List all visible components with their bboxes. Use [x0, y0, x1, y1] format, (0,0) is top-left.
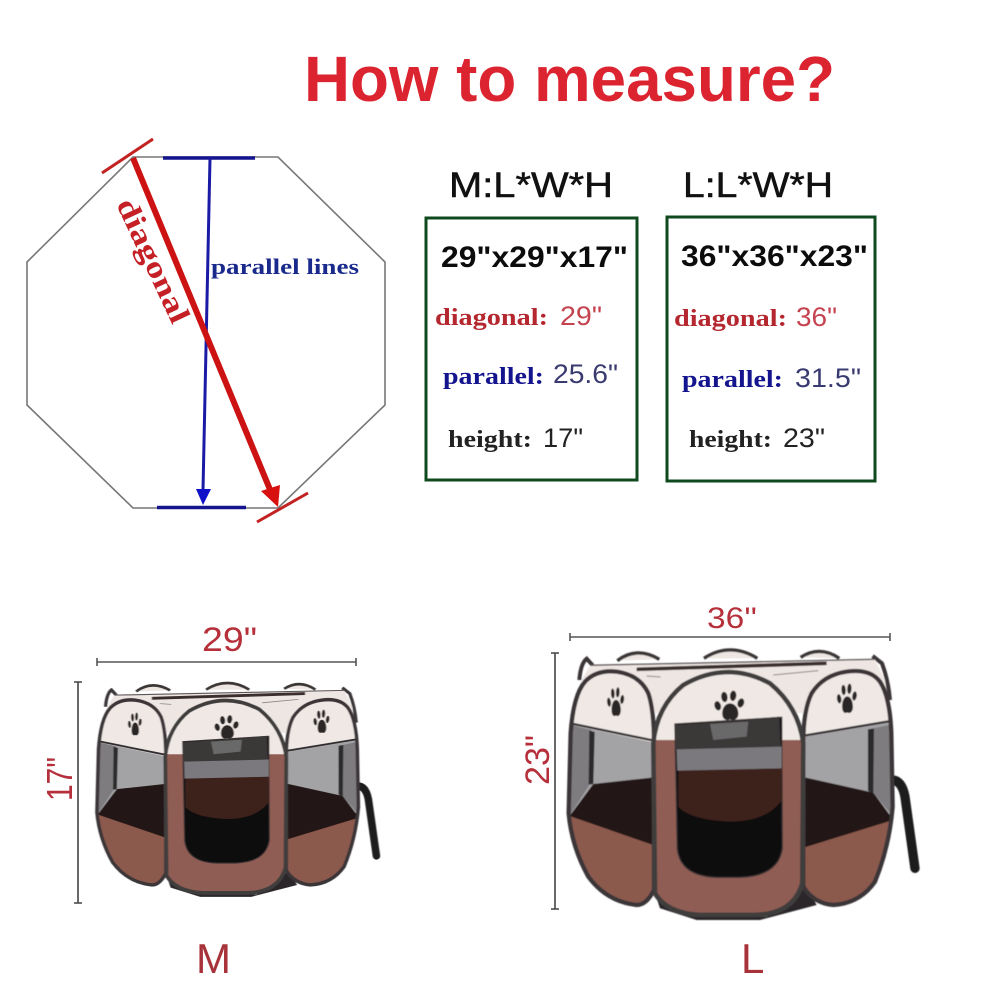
width dimension: 29 inches [97, 621, 356, 666]
label: parallel lines: parallel lines [211, 254, 360, 279]
size label: M: M [196, 935, 231, 982]
L diagonal row [674, 302, 837, 332]
medium pet playpen with dimensions [39, 621, 376, 982]
L height row: 23" [783, 423, 825, 453]
M height row: height: [448, 427, 532, 453]
M diagonal row: 29" [560, 301, 602, 331]
M diagonal row [435, 301, 602, 331]
M parallel row [443, 359, 618, 390]
label: diagonal: diagonal [110, 193, 196, 328]
large pet playpen with dimensions [519, 602, 915, 982]
parallel lines measure arrow [157, 158, 255, 508]
L diagonal row: diagonal: [674, 306, 787, 332]
M parallel row: 25.6" [553, 359, 618, 389]
width dimension: 36 inches: 36'' [707, 602, 757, 635]
height dimension: 23 inches [519, 653, 559, 909]
heading: M: M:L*W*H [449, 166, 613, 205]
M diagonal row: diagonal: [435, 305, 548, 331]
octagon measuring diagram [27, 139, 385, 522]
size label: L: L [741, 935, 764, 982]
title: How to measure? [304, 43, 835, 115]
illustration: large playpen [567, 650, 915, 920]
L height row: height: [689, 427, 772, 453]
L overall dimensions: 36"x36"x23" [681, 240, 868, 273]
M height row: 17" [543, 423, 583, 453]
width dimension: 36 inches [570, 602, 890, 641]
M parallel row: parallel: [443, 364, 544, 390]
illustration: medium playpen [95, 683, 376, 897]
octagon outline [27, 157, 385, 508]
panel border: M [426, 218, 637, 480]
diagonal measure arrow [102, 139, 308, 522]
size panel: L [667, 166, 875, 481]
L parallel row: parallel: [682, 367, 783, 393]
M overall dimensions: 29"x29"x17" [441, 241, 628, 274]
height dimension: 23 inches: 23" [519, 735, 557, 785]
L height row [689, 423, 825, 453]
L parallel row: 31.5" [795, 363, 861, 393]
heading: L: L:L*W*H [683, 166, 833, 205]
L diagonal row: 36" [796, 302, 837, 332]
panel border: L [667, 217, 875, 481]
height dimension: 17 inches [39, 682, 82, 903]
M height row [448, 423, 583, 453]
height dimension: 17 inches: 17" [39, 757, 80, 801]
L parallel row [682, 363, 861, 393]
width dimension: 29 inches: 29" [202, 621, 257, 659]
size panel: M [426, 166, 637, 480]
